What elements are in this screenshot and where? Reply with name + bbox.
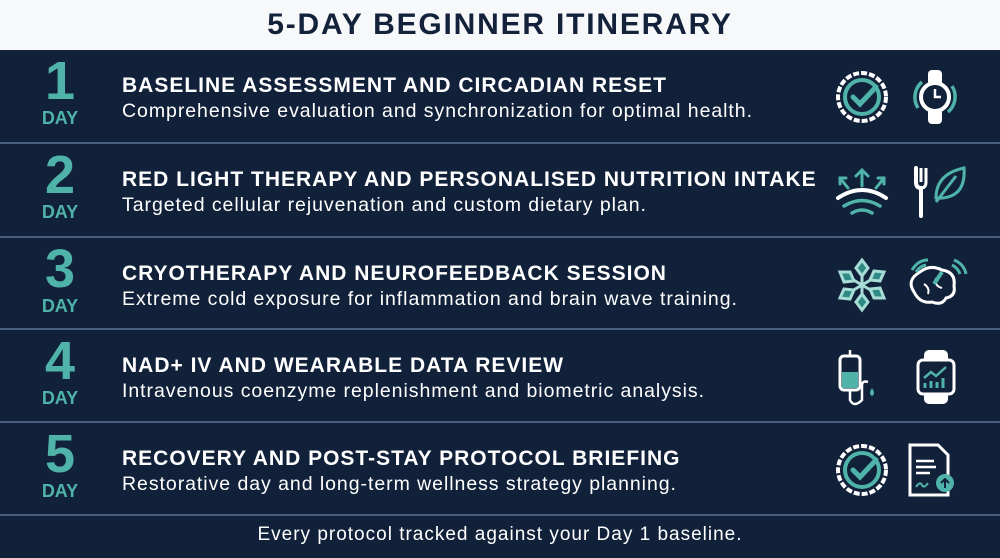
heading day 2: RED LIGHT THERAPY AND PERSONALISED NUTRITION INTAKE [122, 168, 817, 191]
icon: smartwatch chart [918, 350, 954, 404]
title: 5-DAY BEGINNER ITINERARY [267, 8, 733, 41]
icon: check badge [838, 73, 886, 121]
icon: check badge [838, 446, 886, 494]
day label: DAY [42, 202, 78, 222]
icon: IV bag [840, 350, 874, 404]
description day 1: Comprehensive evaluation and synchronization for optimal health. [122, 100, 753, 122]
heading day 3: CRYOTHERAPY AND NEUROFEEDBACK SESSION [122, 262, 667, 285]
day number 3: 3 [45, 239, 75, 299]
icons: snowflake and brain [838, 258, 968, 312]
heading day 4: NAD+ IV AND WEARABLE DATA REVIEW [122, 354, 564, 377]
icons: light and fork [836, 166, 966, 218]
description day 5: Restorative day and long-term wellness strategy planning. [122, 473, 677, 495]
icons: IV bag and smartwatch [838, 350, 956, 406]
row: day 3 [0, 238, 1000, 330]
day label: DAY [42, 108, 78, 128]
day number 5: 5 [45, 424, 75, 484]
footer note: Every protocol tracked against your Day 1 baseline. [257, 524, 743, 545]
description day 2: Targeted cellular rejuvenation and custom dietary plan. [122, 194, 647, 216]
row: day 5 [0, 423, 1000, 515]
row: day 2 [0, 144, 1000, 236]
icon: fork and leaf [916, 168, 964, 216]
heading day 5: RECOVERY AND POST-STAY PROTOCOL BRIEFING [122, 447, 680, 470]
day label: DAY [42, 388, 78, 408]
day number 2: 2 [45, 145, 75, 205]
icons: badge and document [836, 444, 954, 496]
day label: DAY [42, 481, 78, 501]
day number 1: 1 [45, 51, 75, 111]
description day 3: Extreme cold exposure for inflammation and brain wave training. [122, 288, 738, 310]
icon: watch sync [915, 70, 955, 124]
title [0, 0, 1000, 50]
day label: DAY [42, 296, 78, 316]
icon: red light waves [838, 170, 886, 213]
row: day 4 [0, 330, 1000, 422]
icon: document upload [910, 445, 954, 495]
icon: brain neurofeedback [911, 260, 966, 303]
description day 4: Intravenous coenzyme replenishment and biometric analysis. [122, 380, 705, 402]
heading day 1: BASELINE ASSESSMENT AND CIRCADIAN RESET [122, 74, 667, 97]
icons: badge and watch [836, 70, 957, 124]
row: day 1 [0, 50, 1000, 142]
icon: snowflake [840, 260, 884, 310]
day number 4: 4 [45, 331, 75, 391]
